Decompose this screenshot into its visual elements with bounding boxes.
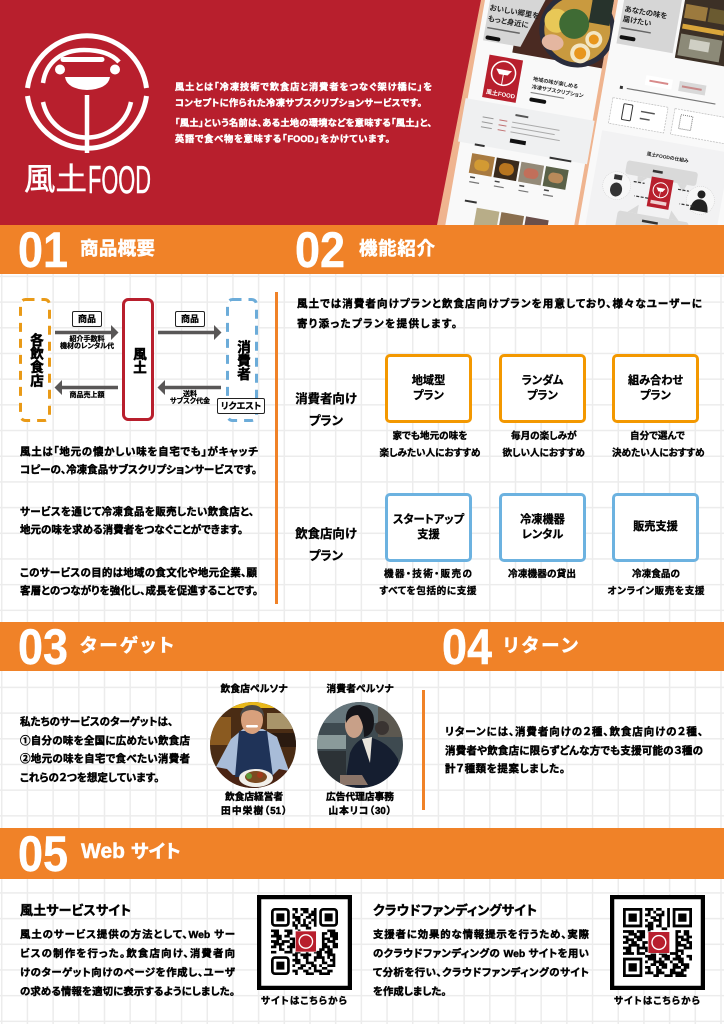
business diagram [19,298,265,422]
crowdfunding text: て分析を行い、クラウドファンディングのサイト [373,968,589,978]
caption: 販売支援 [608,568,705,597]
return text: 計７種類を提案しました。 [445,763,565,775]
persona title: restaurant: 飲食店ペルソナ [220,684,288,695]
logo wordmark [24,157,151,197]
photo: office worker [317,702,403,788]
tag: リクエスト [217,398,265,414]
plan: ランダムプラン: プラン [527,390,558,402]
photo: restaurant owner [210,702,296,788]
features intro: 寄り添ったプランを提供します。 [297,318,457,330]
label: 紹介手数料 [60,334,114,350]
band: sections 01 and 02 [0,225,724,274]
divider 01/02 [275,292,278,604]
caption: 冷凍機器: 冷凍機器の貸出 [508,569,576,580]
QR caption: service site: サイトはこちらから [261,996,347,1007]
target text: ②地元の味を自宅で食べたい消費者 [20,753,190,765]
service site text [20,928,236,998]
plan: 冷凍機器レンタル [499,493,586,562]
overview paragraph 1 [20,446,258,476]
heading: Webサイト: Web サイト [81,840,181,863]
caption: スタートアップ: 機器・技術・販売の [384,569,472,580]
return text: 消費者や飲食店に限らずどんな方でも支援可能の３種の [445,745,703,757]
plan: 地域型プラン [385,354,472,423]
features intro [297,298,702,330]
label: 商品売上額: 商品売上額 [70,392,104,399]
mockup: service site: もっと身近に [487,14,529,30]
plan: 販売支援: 販売支援 [633,521,678,533]
target text [20,716,190,784]
QR code: service site [257,895,352,990]
caption: 地域型: 楽しみたい人におすすめ [380,448,480,459]
label: 送料 サブスク代金: 送料 [183,391,197,398]
overview paragraph 2 [20,506,254,536]
overview paragraph 3: このサービスの目的は地域の食文化や地元企業、顧 [20,567,257,579]
caption: ランダム: 毎月の楽しみが [511,431,577,442]
intro text: コンセプトに作られた冷凍サブスクリプションサービスです。 [175,98,422,108]
number 01: 01 [18,222,68,278]
tag: 商品 left [72,311,102,327]
website mockups [437,0,724,225]
caption: 組み合わせ: 決めたい人におすすめ [612,448,705,459]
number 05: 05 [18,826,68,882]
label: restaurant plans [295,527,357,562]
tag: 商品 left: 商品 [78,314,96,324]
plan: スタートアップ支援 [385,493,472,562]
logo mark [25,33,149,153]
caption: 販売支援: 冷凍食品の [632,569,680,580]
plan: 冷凍機器レンタル: 冷凍機器 [520,514,565,526]
features intro: 風土では消費者向けプランと飲食店向けプランを用意しており、様々なユーザーに [297,298,702,310]
plan: 組み合わせプラン: プラン [640,390,671,402]
heading: 商品概要: 商品概要 [80,238,155,259]
mockup: crowdfunding site: 風土FOODの仕組み [646,150,689,165]
persona caption: consumer: 山本リコ（30） [328,806,392,816]
node: 風土: 風土 [131,347,146,374]
mockup: service site: おいしい郷里を [489,3,540,21]
label: 送料 サブスク代金: サブスク代金 [170,398,210,405]
plan: 冷凍機器レンタル: レンタル [522,528,563,540]
overview paragraph 1: 風土は「地元の懐かしい味を自宅でも」がキャッチ [20,446,258,458]
heading: リターン: リターン [503,635,578,656]
plan: 地域型プラン: 地域型 [412,375,445,387]
label: consumer plans [295,392,357,428]
header panel [0,0,724,225]
band: section 05 [0,828,724,879]
service site text: の求める情報を適切に表示するようにしました。 [20,986,235,998]
label: restaurant plans: プラン [309,548,343,562]
number 04: 04 [442,619,492,675]
caption: 地域型: 家でも地元の味を [392,431,467,442]
heading: 機能紹介: 機能紹介 [359,238,435,259]
overview paragraph 2: サービスを通じて冷凍食品を販売したい飲食店と、 [20,506,254,518]
crowdfunding text [373,928,590,998]
heading: crowdfunding site: クラウドファンディングサイト [373,903,537,918]
node: 消費者: 消費者 [235,340,250,380]
crowdfunding text: を作成しました。 [373,986,446,998]
mockup: crowdfunding site: 届けたい [622,14,652,28]
persona caption: consumer: 広告代理店事務 [326,792,394,803]
target text: ①自分の味を全国に広めたい飲食店 [20,735,190,747]
intro text 2: 「風土」という名前は、ある土地の環境などを意味する「風土」と、 [175,118,432,128]
crowdfunding text: のクラウドファンディングの Web サイトを用い [373,948,589,960]
node: 各飲食店: 各飲食店 [28,333,43,387]
caption: スタートアップ [380,568,477,597]
number 02: 02 [295,222,345,278]
persona caption: restaurant [221,791,287,816]
plan: スタートアップ支援: 支援 [417,528,440,540]
tag: リクエスト: リクエスト [221,401,261,411]
QR caption: crowdfunding site: サイトはこちらから [614,996,700,1007]
persona title: consumer: 消費者ペルソナ [326,684,394,695]
QR code: crowdfunding site [610,895,705,990]
intro text 2 [174,118,432,144]
service site text: けのターゲット向けのページを作成し、ユーザ [20,968,235,978]
caption: 組み合わせ: 自分で選んで [630,431,685,442]
persona caption: restaurant: 飲食店経営者 [225,792,283,803]
overview paragraph 3 [20,566,258,597]
plan: ランダムプラン [499,354,586,423]
persona caption: restaurant: 田中栄樹（51） [221,806,287,816]
mockup: crowdfunding site: あなたの味を [624,4,668,21]
return text: リターンには、消費者向けの２種、飲食店向けの２種、 [445,726,703,738]
label: 紹介手数料: 機材のレンタル代 [60,343,114,350]
crowdfunding text: 支援者に効果的な情報提示を行うため、実際 [373,930,589,940]
plan: 販売支援 [612,493,699,562]
service site text: ビスの制作を行った。飲食店向け、消費者向 [20,948,235,960]
plan: スタートアップ支援: スタートアップ [393,514,464,526]
caption: 販売支援: オンライン販売を支援 [608,586,704,597]
label: 紹介手数料: 紹介手数料 [70,336,104,343]
intro text 2: 英語で食べ物を意味する「FOOD」をかけています。 [175,134,390,144]
plan: ランダムプラン: ランダム [522,375,563,387]
intro text: 風土とは「冷凍技術で飲食店と消費者をつなぐ架け橋に」を [175,82,432,92]
mockup: crowdfunding site [578,0,724,225]
heading: ターゲット: ターゲット [80,635,174,656]
overview paragraph 3: 客層とのつながりを強化し、成長を促進することです。 [20,585,258,597]
target text: 私たちのサービスのターゲットは、 [20,716,173,728]
target text: これらの２つを想定しています。 [20,772,159,784]
caption: ランダム [502,430,585,459]
label: 送料 サブスク代金 [170,390,210,405]
persona caption: consumer [326,791,394,816]
label: restaurant plans: 飲食店向け [295,527,357,541]
mockup: service site [445,0,614,225]
label: consumer plans: プラン [309,414,343,428]
tag: 商品 right [175,311,205,327]
mockup: service site: 地域の味が楽しめる [532,75,579,90]
caption: 地域型 [380,430,480,459]
plan: 組み合わせプラン [612,354,699,423]
overview paragraph 2: 地元の味を求める消費者をつなぐことができます。 [20,524,243,536]
heading: service site: 風土サービスサイト [20,903,131,918]
return text [445,726,703,775]
divider 03/04 [422,690,425,810]
band: sections 03 and 04 [0,622,724,670]
caption: スタートアップ: すべてを包括的に支援 [380,586,476,597]
caption: ランダム: 欲しい人におすすめ [502,448,585,459]
plan: 地域型プラン: プラン [413,390,444,402]
tag: 商品 right: 商品 [181,314,199,324]
service site text: 風土のサービス提供の方法として、Web サー [20,930,235,940]
label: consumer plans: 消費者向け [295,392,357,406]
plan: 組み合わせプラン: 組み合わせ [628,375,683,387]
mockup: service site: 風土FOOD [485,88,516,101]
mockup: service site: 冷凍サブスクリプション [531,82,584,100]
intro text [174,82,432,108]
overview paragraph 1: コピーの、冷凍食品サブスクリプションサービスです。 [20,464,257,476]
number 03: 03 [18,619,68,675]
caption: 組み合わせ [612,430,705,459]
